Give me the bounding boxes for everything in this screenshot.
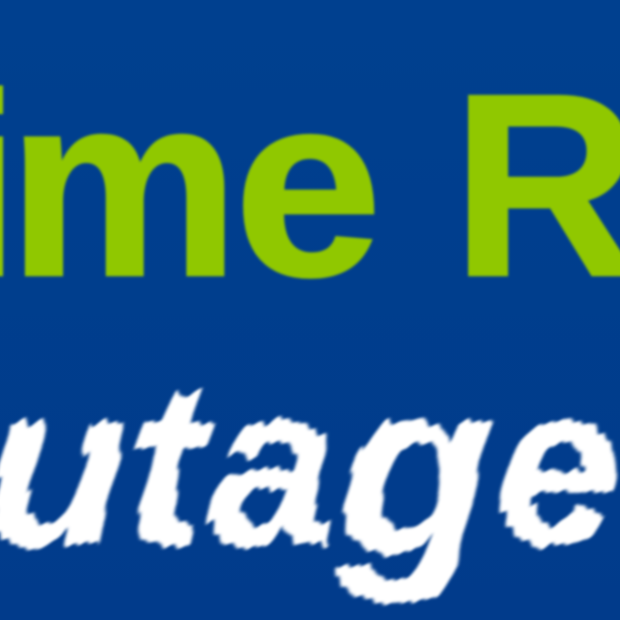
heading: green title fragment [0,41,620,331]
subheading: white italic fragment: t [127,339,215,593]
subheading: white italic fragment [0,330,620,604]
subheading: white italic fragment: g [335,330,497,604]
subheading: white italic fragment: a [207,339,337,593]
heading: green title fragment: m [8,41,239,331]
heading: green title fragment: e [234,41,382,331]
subheading: white italic fragment: e [493,339,620,593]
